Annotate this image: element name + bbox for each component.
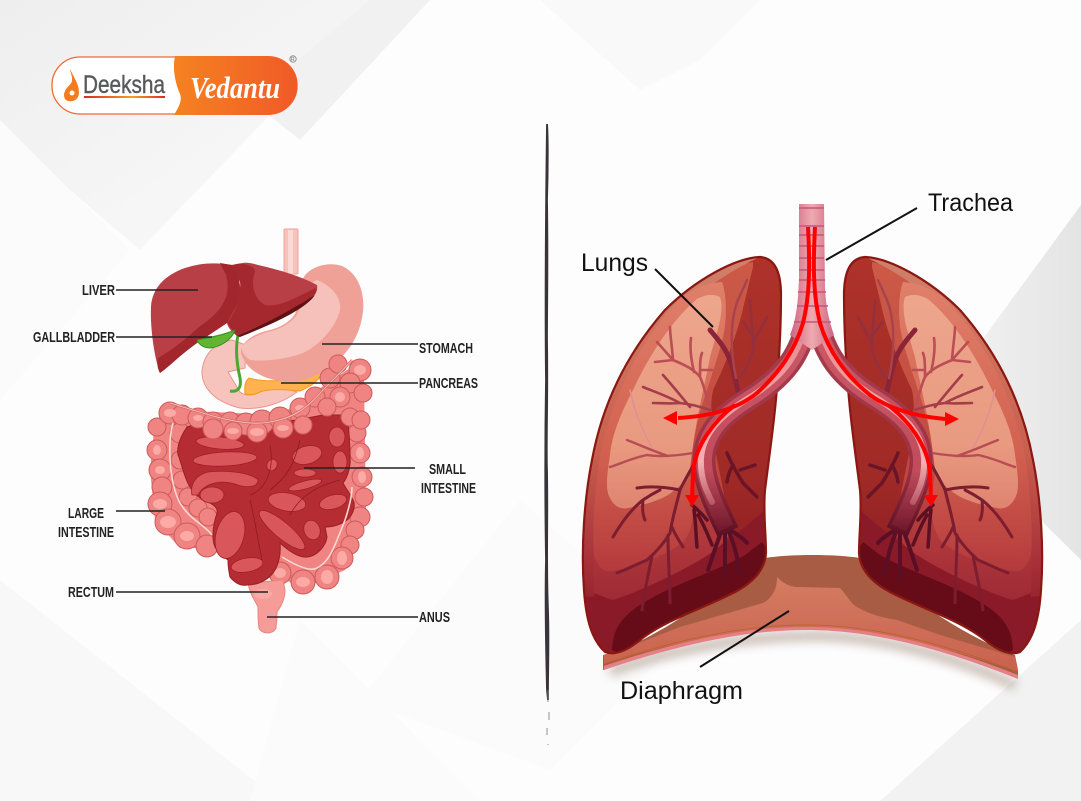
label: LARGE INTESTINE: INTESTINE — [58, 524, 114, 541]
gallbladder — [197, 330, 235, 348]
respiratory leader lines — [655, 208, 917, 667]
trachea — [790, 204, 834, 350]
registered mark: R — [291, 57, 295, 63]
label: STOMACH: STOMACH — [419, 340, 473, 357]
label: SMALL INTESTINE: SMALL — [429, 461, 466, 478]
red airflow arrows: right — [814, 227, 959, 507]
logo underline — [84, 96, 165, 98]
logo text: Vedantu: Vedantu — [190, 70, 280, 105]
liver — [151, 263, 317, 373]
label: GALLBLADDER: GALLBLADDER — [33, 329, 115, 346]
label: Lungs: Lungs — [581, 249, 648, 277]
respiratory system illustration — [580, 204, 1045, 685]
small intestine — [178, 415, 354, 585]
esophagus — [284, 229, 298, 274]
label: LIVER: LIVER — [82, 282, 115, 299]
right lung — [844, 257, 1045, 660]
label: LARGE INTESTINE: LARGE — [68, 505, 104, 522]
label: RECTUM: RECTUM — [68, 584, 114, 601]
duodenum — [202, 340, 297, 408]
bronchi — [701, 320, 924, 532]
bile duct — [230, 335, 240, 391]
label: PANCREAS: PANCREAS — [419, 375, 478, 392]
rectum and anus — [248, 580, 285, 633]
pancreas — [245, 372, 322, 395]
digestive system illustration — [147, 229, 373, 633]
label: ANUS: ANUS — [419, 609, 450, 626]
digestive leader lines — [116, 290, 418, 617]
divider — [545, 124, 548, 700]
registered mark — [290, 56, 296, 63]
stomach — [241, 264, 363, 382]
label: LARGE INTESTINE — [58, 505, 114, 541]
label: Trachea: Trachea — [928, 189, 1013, 217]
logo text: Deeksha: Deeksha — [83, 71, 165, 99]
icon: flame — [64, 69, 79, 101]
label: SMALL INTESTINE — [421, 461, 476, 497]
label: SMALL INTESTINE: INTESTINE — [421, 480, 476, 497]
logo: Deeksha Vedantu — [52, 56, 298, 115]
divider fading tail — [547, 690, 549, 745]
left lung — [580, 257, 781, 660]
diaphragm — [603, 555, 1018, 685]
colon band — [170, 360, 352, 569]
red airflow arrows: left — [663, 227, 809, 507]
label: Diaphragm: Diaphragm — [620, 677, 743, 705]
large intestine: transverse segment — [159, 355, 372, 442]
large intestine: side segments — [147, 368, 373, 594]
